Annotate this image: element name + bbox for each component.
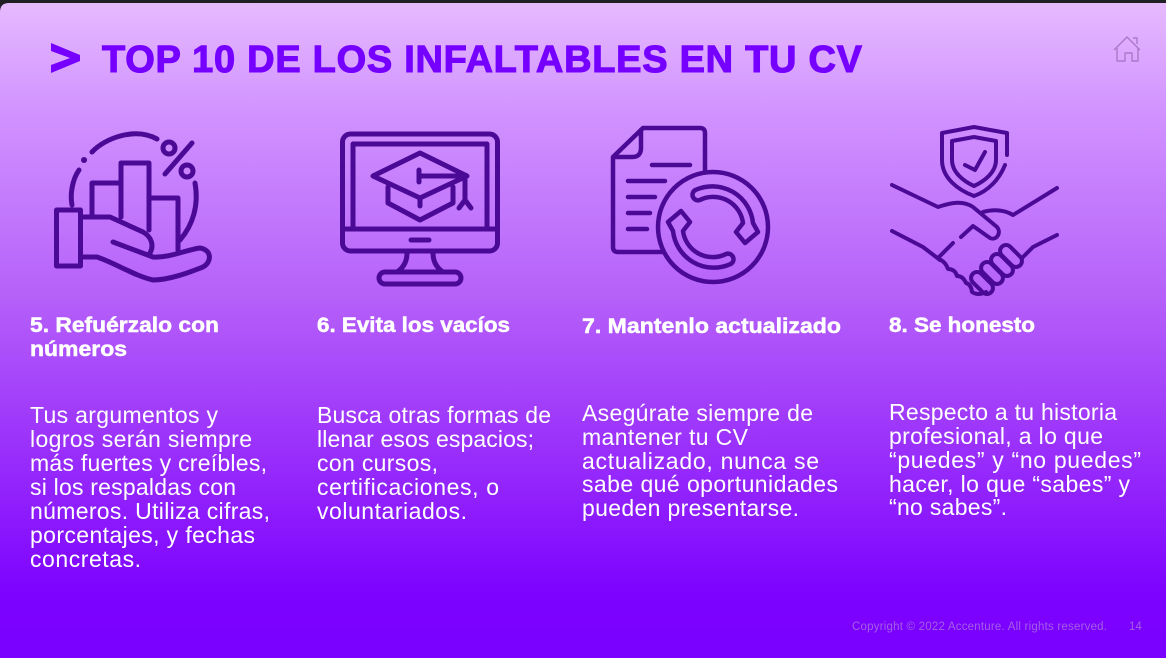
icon: handshake with shield <box>892 127 1057 296</box>
body 7: Asegúrate siempre de <box>582 400 813 426</box>
body 5: más fuertes y creíbles, <box>30 450 267 476</box>
body 6: voluntariados. <box>317 498 467 524</box>
body 8: Respecto a tu historia <box>889 399 1117 425</box>
body 8: “puedes” y “no puedes” <box>889 447 1141 473</box>
body 5: logros serán siempre <box>30 426 252 452</box>
body 6 <box>317 402 551 524</box>
body 5: números. Utiliza cifras, <box>30 498 270 524</box>
column 8: se honesto <box>889 314 1141 520</box>
icon: title chevron <box>51 43 80 73</box>
body 5: Tus argumentos y <box>30 402 218 428</box>
heading 5 <box>30 314 219 361</box>
body 7: sabe qué oportunidades <box>582 471 838 497</box>
icon: hand holding bar chart with percent <box>56 134 209 280</box>
title <box>51 39 863 81</box>
body 7 <box>582 400 838 521</box>
heading 5: números <box>30 338 127 361</box>
icon: home <box>1114 37 1140 61</box>
body 7: pueden presentarse. <box>582 495 799 521</box>
body 6: Busca otras formas de <box>317 402 551 428</box>
body 8: profesional, a lo que <box>889 423 1103 449</box>
page number: 14 <box>1129 621 1142 633</box>
heading 7: 7. Mantenlo actualizado <box>582 315 841 338</box>
body 6: con cursos, <box>317 450 438 476</box>
heading 5: 5. Refuérzalo con <box>30 314 219 337</box>
body 7: mantener tu CV <box>582 424 749 450</box>
body 7: actualizado, nunca se <box>582 448 819 474</box>
footer copyright: Copyright © 2022 Accenture. All rights reserved. <box>852 621 1107 633</box>
body 5: concretas. <box>30 546 141 572</box>
column 7: mantenlo actualizado <box>582 315 841 521</box>
body 8 <box>889 399 1141 520</box>
column 5: refuérzalo con números <box>30 314 270 572</box>
body 8: hacer, lo que “sabes” y <box>889 471 1130 497</box>
body 5: porcentajes, y fechas <box>30 522 255 548</box>
heading 6: 6. Evita los vacíos <box>317 314 510 337</box>
column 6: evita los vacíos <box>317 314 551 524</box>
body 8: “no sabes”. <box>889 494 1007 520</box>
body 6: certificaciones, o <box>317 474 499 500</box>
icon: monitor with graduation cap <box>342 134 498 284</box>
body 5: si los respaldas con <box>30 474 236 500</box>
icon: document with refresh arrows <box>613 128 768 282</box>
body 5 <box>30 402 270 572</box>
heading 8: 8. Se honesto <box>889 314 1035 337</box>
title text: TOP 10 DE LOS INFALTABLES EN TU CV <box>102 39 863 81</box>
body 6: llenar esos espacios; <box>317 426 534 452</box>
